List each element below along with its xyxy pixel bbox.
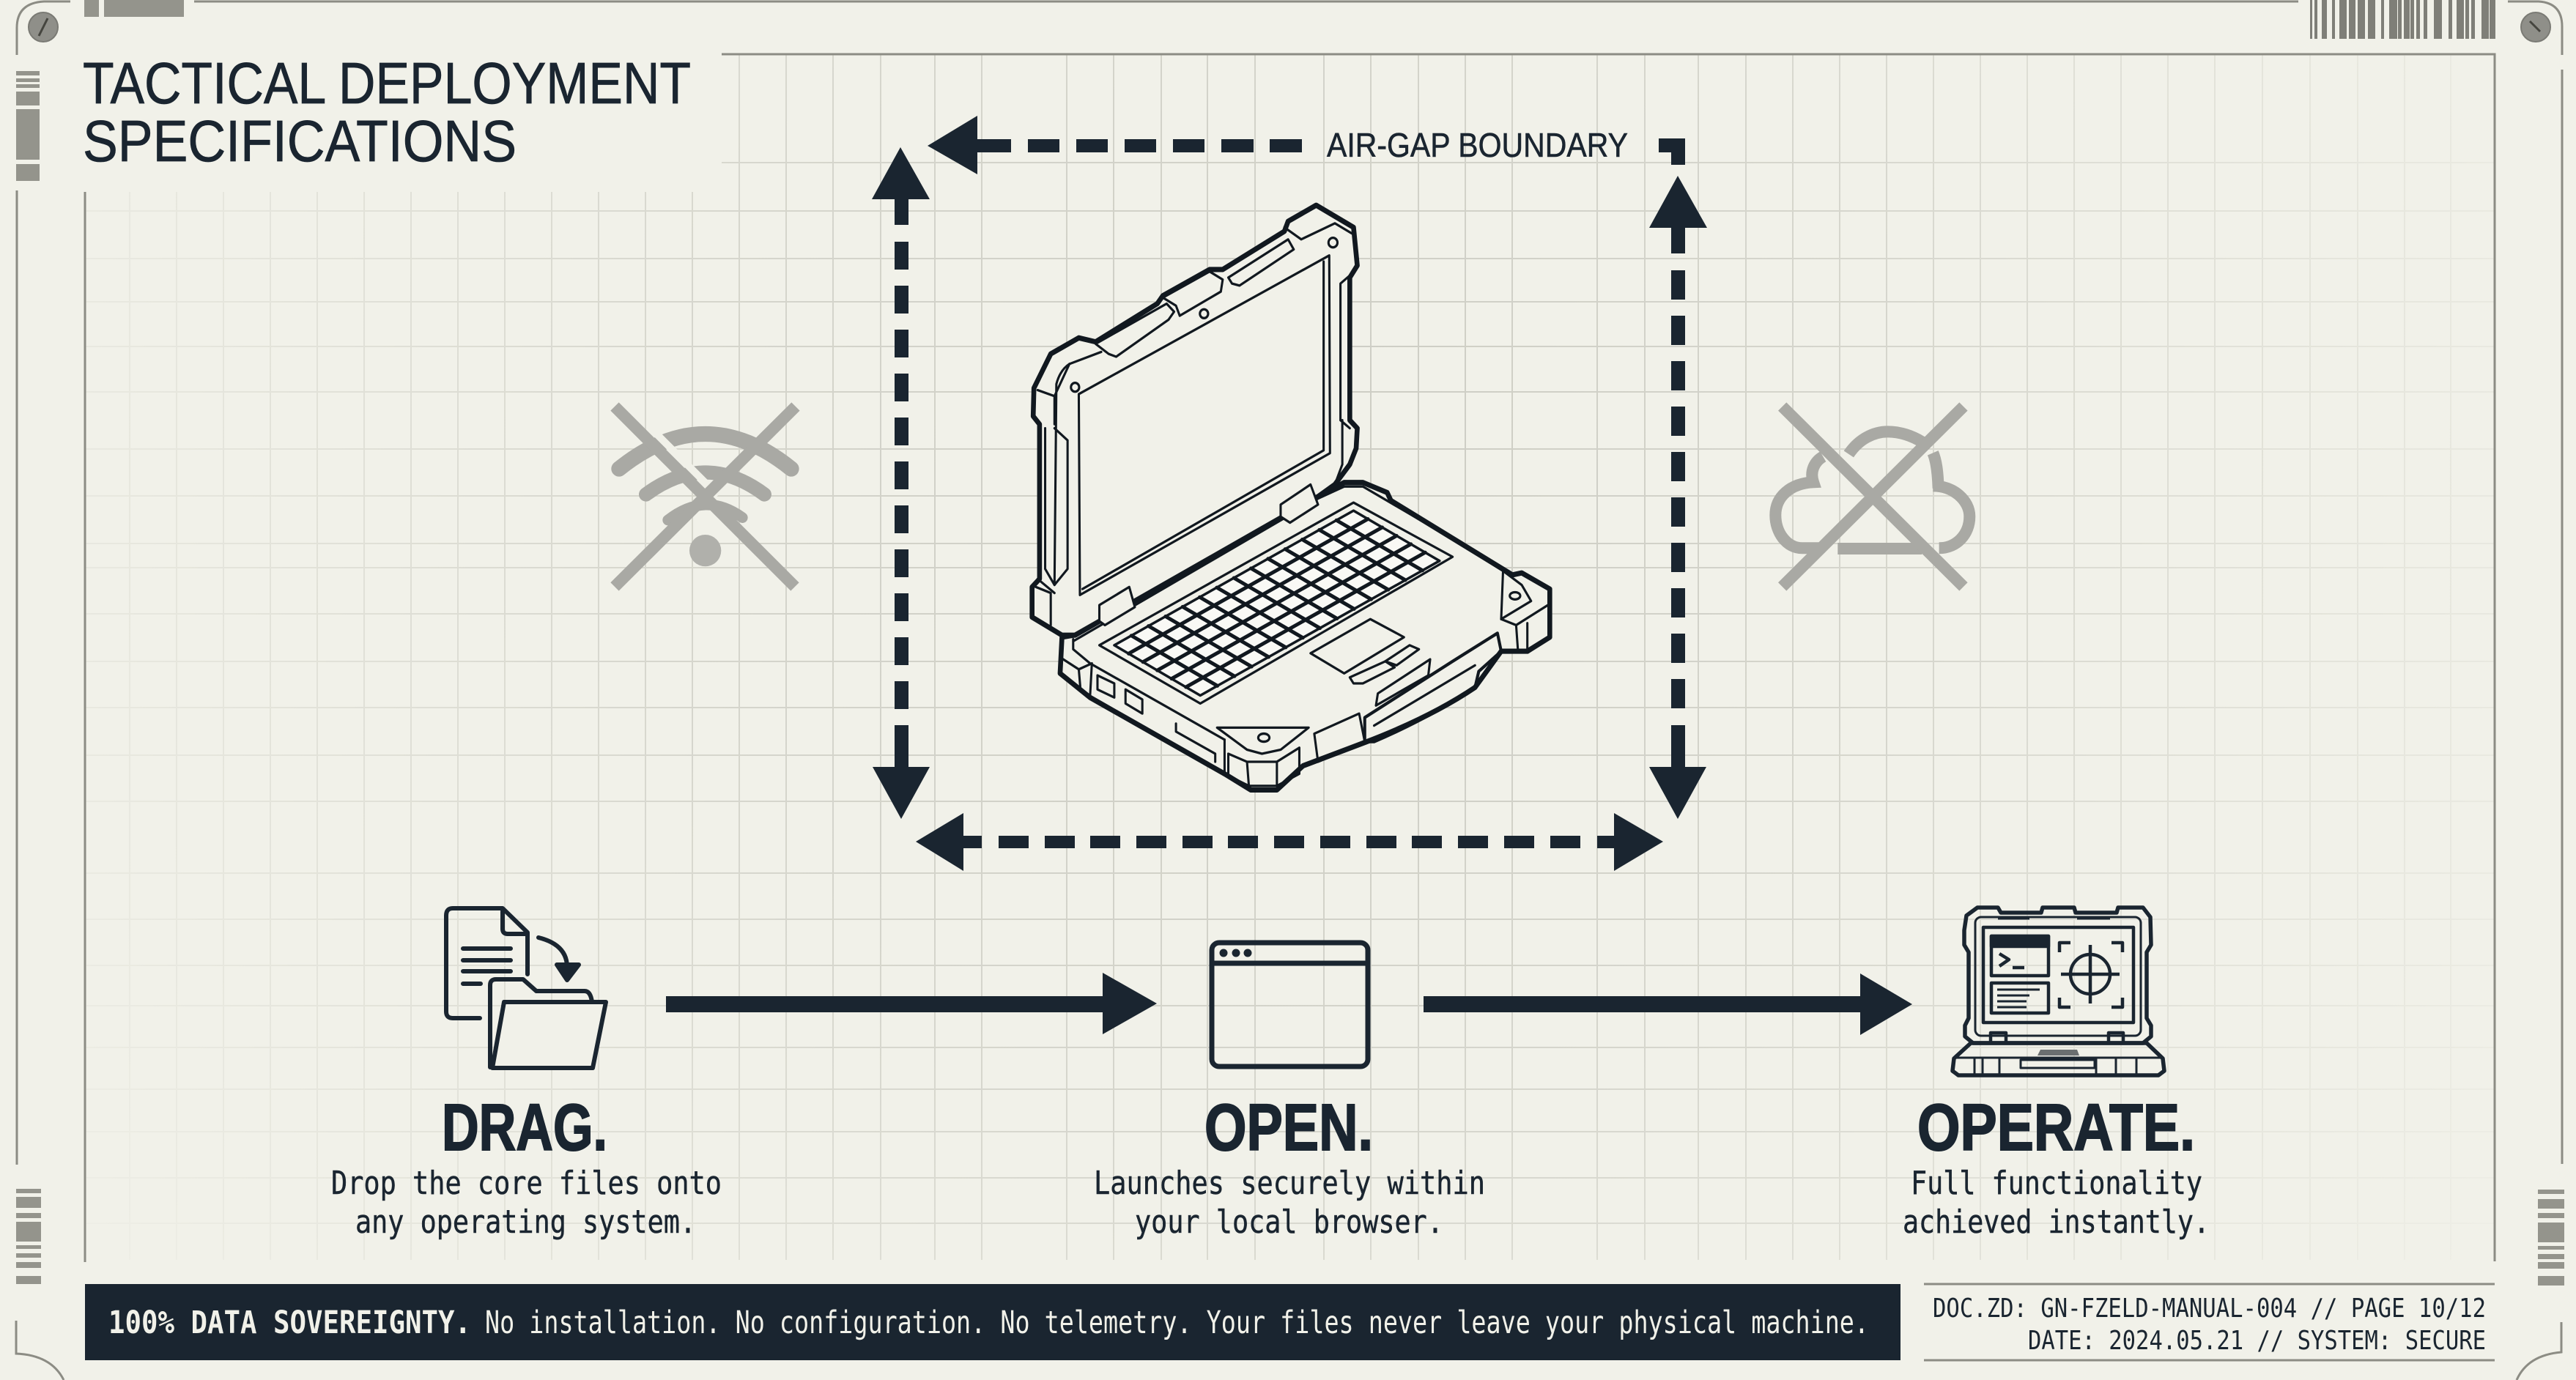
step: drag text: Drop the core files onto [331,1165,722,1202]
barcode: top right [2310,0,2495,39]
step: drag text: any operating system. [355,1203,696,1241]
step: operate text [1903,1091,2210,1241]
footer banner: data sovereignty: 100% DATA SOVEREIGNTY. [108,1305,471,1341]
footer banner: data sovereignty: No installation. No configuration. No telemetry. Your files never leave your physical machine. [485,1305,1869,1341]
arrow: bottom dashed boundary [916,813,1663,871]
laptop keyboard [1100,502,1453,703]
arrow: left dashed boundary [872,147,930,819]
arrow: top dashed boundary [928,116,1685,174]
arrow: drag to open [666,973,1157,1034]
footer banner: data sovereignty [85,1284,1900,1360]
step: open text: Launches securely within [1094,1165,1485,1202]
icon: wifi disabled [615,407,796,587]
document info block [1924,1284,2495,1360]
title: SPECIFICATIONS [83,108,517,174]
air-gap boundary label: AIR-GAP BOUNDARY [1327,126,1628,164]
barcode: right bottom [2538,1190,2564,1286]
arrow: open to operate [1424,973,1912,1035]
screw: top left [29,12,58,42]
laptop base [1060,483,1550,790]
title [83,51,691,174]
step: drag text [331,1091,722,1241]
laptop lid [1032,205,1358,635]
icon: operating rugged laptop [1953,908,2164,1075]
step: operate text: achieved instantly. [1903,1203,2210,1241]
step: open text: OPEN. [1204,1091,1373,1165]
top header tabs [84,0,184,17]
barcode: left bottom [16,1189,41,1284]
step: open text: your local browser. [1135,1203,1443,1241]
barcode: left top [16,71,40,181]
step: drag text: DRAG. [442,1091,607,1165]
step: open text [1094,1091,1485,1241]
icon: cloud disabled [1775,407,1969,587]
arrow: right dashed boundary [1649,176,1707,819]
step: operate text: OPERATE. [1917,1091,2195,1165]
document info block: DOC.ZD: GN-FZELD-MANUAL-004 // PAGE 10/12 [1933,1294,2486,1324]
icon: browser window [1212,943,1368,1066]
icon: drag files to folder [446,908,606,1068]
step: operate text: Full functionality [1911,1165,2202,1202]
screw: top right [2521,12,2550,42]
central rugged laptop [1032,205,1550,790]
title: TACTICAL DEPLOYMENT [83,51,691,116]
document info block: DATE: 2024.05.21 // SYSTEM: SECURE [2028,1326,2486,1356]
